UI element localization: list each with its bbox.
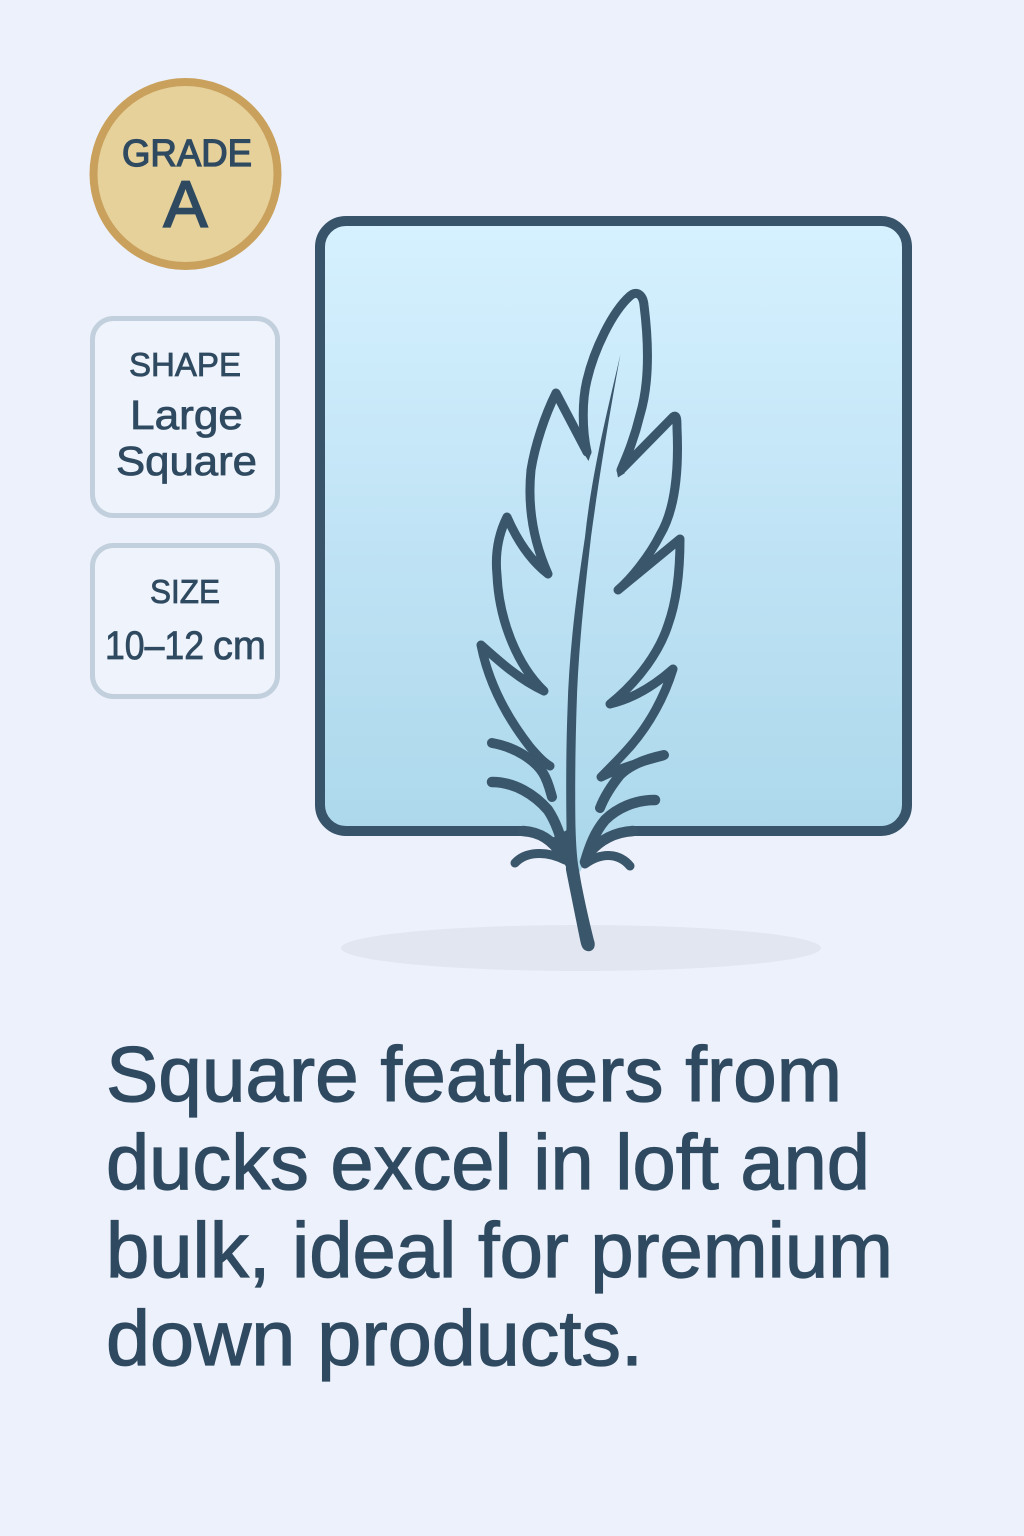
headline [106, 1030, 893, 1382]
feather: curved junction with panel frame [523, 831, 562, 855]
feather: upper outline [583, 293, 680, 777]
headline: Square feathers from [106, 1030, 842, 1118]
shape card: Square [116, 438, 257, 484]
size card [92, 546, 278, 696]
size card: SIZE [150, 573, 220, 610]
headline: bulk, ideal for premium [106, 1206, 893, 1294]
size card: cm [213, 624, 266, 668]
grade badge [94, 82, 278, 266]
feather: small base barbs [515, 854, 565, 863]
shape card [92, 318, 278, 516]
headline: down products. [106, 1294, 643, 1382]
feather: dark junction fill [552, 830, 570, 872]
shape card: SHAPE [129, 346, 241, 383]
ground shadow [341, 925, 821, 971]
feather: shaft [566, 354, 620, 951]
feather icon [481, 293, 680, 951]
size card: 10–12 [105, 624, 204, 668]
grade badge: A [164, 167, 208, 241]
shape card: Large [130, 392, 243, 438]
grade badge: GRADE [122, 133, 252, 175]
headline: ducks excel in loft and [106, 1118, 870, 1206]
blue feather panel [320, 221, 907, 872]
feather: lower barbs [492, 743, 552, 797]
feather: sharp notch tips [583, 452, 625, 478]
feather: left outline [481, 393, 587, 766]
